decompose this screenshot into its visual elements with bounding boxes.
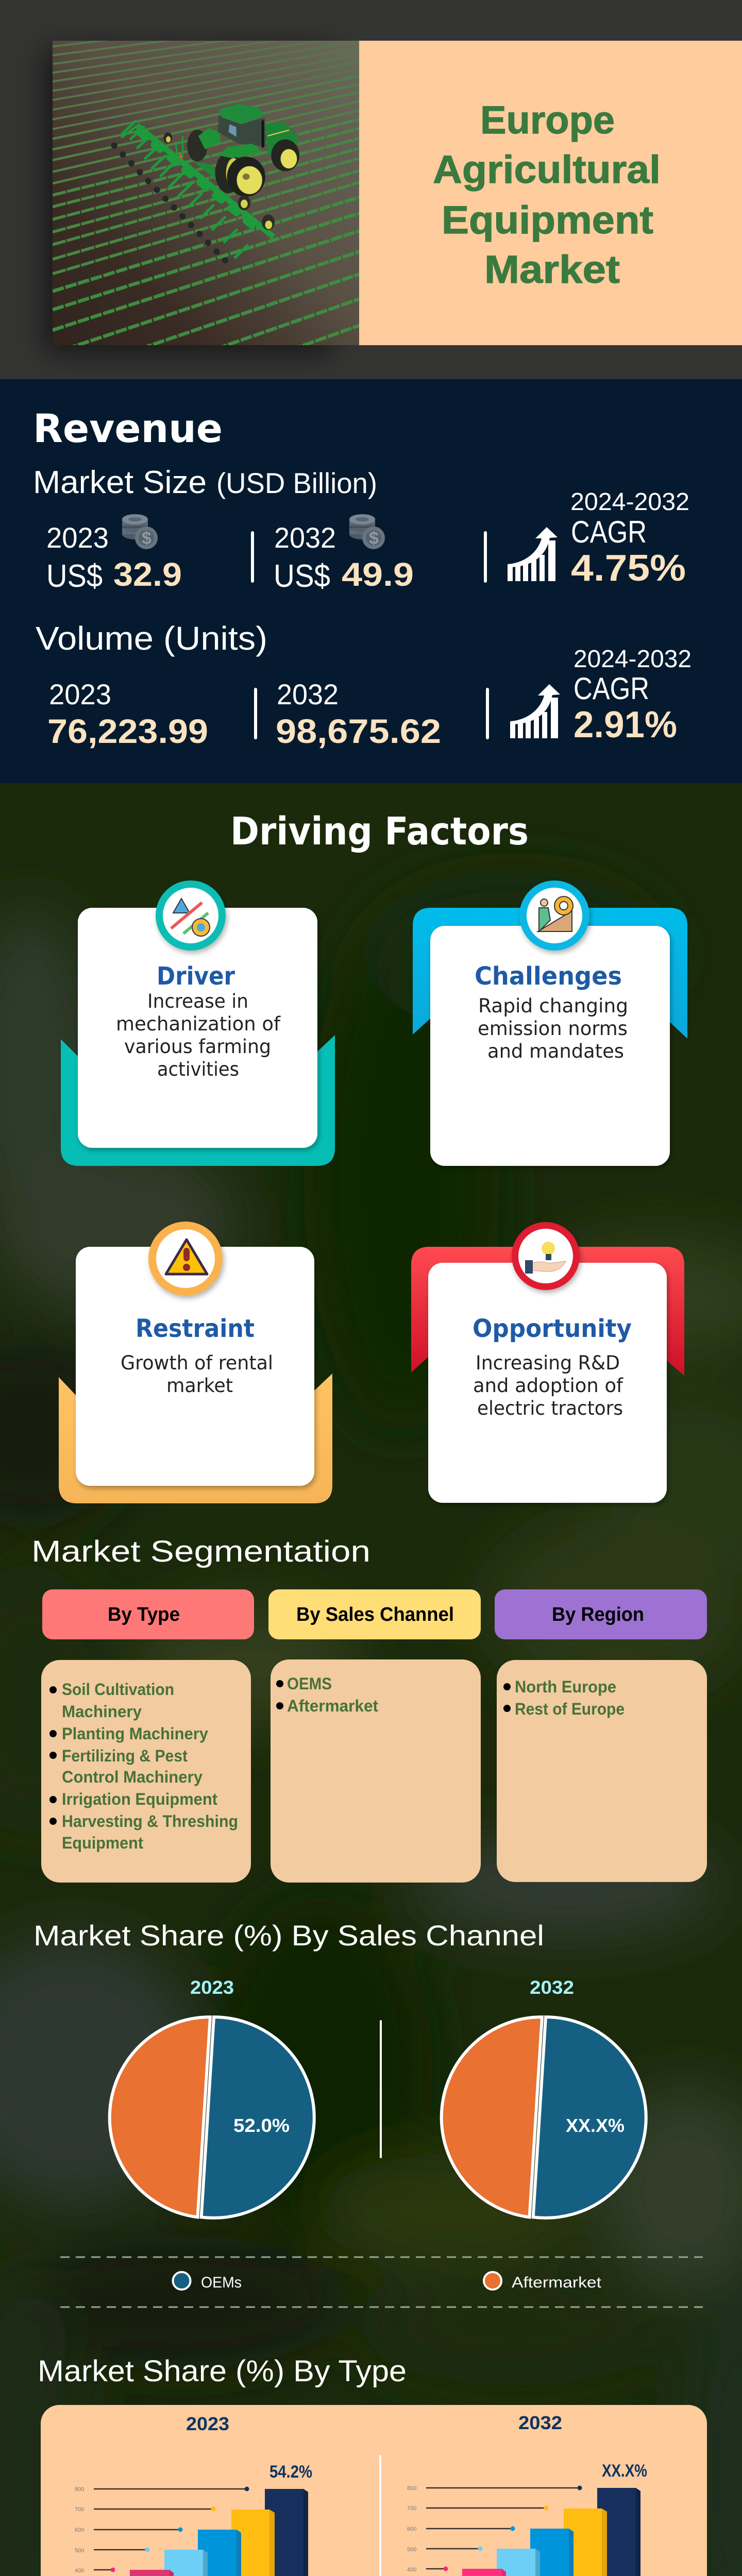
bar chart: 2023: 500 xyxy=(75,2548,84,2554)
pie chart: 2023: 2023 xyxy=(190,1977,234,1998)
stat: 2032 revenue: US$ xyxy=(274,558,330,594)
body text xyxy=(116,990,281,1080)
card: Challenges xyxy=(413,880,687,1166)
stat: revenue CAGR: CAGR xyxy=(571,515,647,549)
panel: bar charts xyxy=(41,2405,707,2576)
divider xyxy=(379,2455,381,2576)
stat: 2032 volume: 98,675.62 xyxy=(276,712,441,750)
icon: coins xyxy=(122,514,158,549)
title: Europe xyxy=(480,98,615,142)
stat: volume CAGR xyxy=(574,646,692,745)
bar chart: 2032: 400 xyxy=(407,2567,416,2573)
stat: 2023 revenue: 32.9 xyxy=(113,556,182,593)
segment list: By Type: Irrigation Equipment xyxy=(62,1790,217,1808)
body text: Increase in xyxy=(147,990,248,1012)
segment list: By Type: Soil Cultivation xyxy=(62,1680,174,1699)
legend: sales channel: OEMs xyxy=(201,2274,242,2291)
stat: 2032 volume xyxy=(276,678,441,750)
subheading: market size: (USD Billion) xyxy=(216,467,377,499)
segment header: By Region: By Region xyxy=(552,1604,644,1625)
stat: 2032 revenue: 49.9 xyxy=(342,556,414,593)
bar chart: 2023 xyxy=(75,2413,312,2576)
body text: various farming xyxy=(124,1036,271,1058)
tractor xyxy=(187,104,299,230)
segment list: By Type: Equipment xyxy=(62,1834,143,1852)
body text: Growth of rental xyxy=(121,1352,273,1374)
divider xyxy=(380,2020,382,2158)
body text: Increasing R&D xyxy=(476,1352,620,1374)
bar chart: 2023: 2023 xyxy=(186,2413,229,2434)
segment list: By Region: Rest of Europe xyxy=(515,1700,625,1718)
revenue panel xyxy=(0,379,742,783)
stat: 2023 revenue: 2023 xyxy=(46,521,109,554)
icon: growth chart xyxy=(510,684,560,738)
stat: revenue CAGR xyxy=(570,488,689,589)
icon: warning badge xyxy=(148,1222,223,1296)
segment list: By Type: Machinery xyxy=(62,1702,142,1721)
body text: market xyxy=(166,1375,233,1397)
body text: activities xyxy=(157,1058,239,1080)
divider xyxy=(251,531,254,583)
legend: sales channel xyxy=(173,2272,602,2291)
bar chart: 2023: 700 xyxy=(75,2506,84,2513)
pie chart: 2032: XX.X% xyxy=(566,2115,625,2136)
subheading: market size xyxy=(33,465,377,500)
cultivator toolbar xyxy=(114,121,274,266)
bar chart: 2032: 700 xyxy=(407,2505,416,2512)
body text: mechanization of xyxy=(116,1013,281,1035)
icon: opportunity badge xyxy=(512,1222,580,1290)
segment header: By Sales Channel xyxy=(268,1589,481,1639)
heading: Driver xyxy=(157,962,235,991)
bar chart: 2032 xyxy=(407,2412,647,2576)
page background: blurred dark green foliage xyxy=(0,783,742,2576)
segment header: By Type xyxy=(42,1589,254,1639)
heading: Challenges xyxy=(475,962,622,991)
stat: 2023 volume xyxy=(47,678,208,750)
icon: coins: $ xyxy=(142,529,151,548)
icon: growth chart xyxy=(508,527,558,581)
divider xyxy=(254,688,257,739)
pie chart: 2032 xyxy=(442,1977,646,2218)
icon: driver badge xyxy=(156,880,226,951)
bar chart: 2032: 600 xyxy=(407,2526,416,2532)
title xyxy=(433,98,661,292)
segment header: By Sales Channel: By Sales Channel xyxy=(296,1604,454,1625)
bar chart: 2032: 500 xyxy=(407,2547,416,2553)
body text: and mandates xyxy=(487,1040,624,1062)
stat: volume CAGR: 2024-2032 xyxy=(574,646,692,673)
stat: volume CAGR: 2.91% xyxy=(574,704,677,745)
bar chart: 2032: XX.X% xyxy=(602,2461,647,2481)
icon: coins xyxy=(349,514,385,549)
heading: Revenue: Revenue xyxy=(33,405,223,451)
bar chart: 2032: 800 xyxy=(407,2485,416,2492)
lower sections: segmentation, market share, key players, footer xyxy=(31,1535,707,2576)
body text xyxy=(478,995,628,1062)
segment list: By Type: Planting Machinery xyxy=(62,1724,208,1743)
stat: 2032 volume: 2032 xyxy=(277,678,339,710)
segment header: By Region xyxy=(495,1589,707,1639)
divider xyxy=(486,688,489,739)
card: Opportunity xyxy=(411,1222,684,1503)
segment list: By Type: Control Machinery xyxy=(62,1768,203,1786)
stat: 2023 revenue: US$ xyxy=(46,558,103,594)
photo: tractor in field xyxy=(53,41,359,345)
stat: 2023 volume: 76,223.99 xyxy=(47,712,208,750)
segment list: By Type xyxy=(41,1660,251,1883)
card: Restraint xyxy=(59,1222,332,1503)
upper sections: header, revenue, driving factors xyxy=(0,0,742,1505)
heading: Market Segmentation: Market Segmentation xyxy=(31,1535,370,1568)
stat: volume CAGR: CAGR xyxy=(574,671,649,706)
stat: revenue CAGR: 4.75% xyxy=(571,548,686,589)
segment list: By Type: Harvesting & Threshing xyxy=(62,1812,238,1831)
segment list: By Sales Channel: Aftermarket xyxy=(287,1697,378,1715)
body text: and adoption of xyxy=(473,1375,623,1397)
segment list: By Region xyxy=(497,1660,707,1882)
body text: Rapid changing xyxy=(478,995,628,1017)
body text: electric tractors xyxy=(477,1397,623,1419)
card: Driver xyxy=(61,880,335,1166)
subheading: volume: Volume (Units) xyxy=(36,620,267,657)
icon: challenges badge xyxy=(519,880,589,951)
segment list: By Region: North Europe xyxy=(515,1677,616,1696)
segment list: By Type: Fertilizing & Pest xyxy=(62,1747,188,1765)
pie chart: 2023: 52.0% xyxy=(233,2115,290,2136)
pie chart: 2023 xyxy=(110,1977,314,2218)
body text xyxy=(473,1352,623,1419)
heading: Market Share By Type: Market Share (%) By Type xyxy=(38,2354,407,2388)
title panel xyxy=(359,41,742,345)
legend: sales channel: Aftermarket xyxy=(512,2274,602,2291)
stat: 2032 revenue xyxy=(274,521,414,594)
body text: emission norms xyxy=(478,1018,628,1040)
heading: Market Share By Sales Channel: Market Share (%) By Sales Channel xyxy=(33,1919,544,1952)
heading: Restraint xyxy=(136,1314,255,1343)
stat: 2023 revenue xyxy=(46,521,182,594)
bar chart: 2023: 800 xyxy=(75,2486,84,2493)
stat: 2032 revenue: 2032 xyxy=(274,521,336,554)
heading: Driving Factors: Driving Factors xyxy=(230,809,529,854)
bar chart: 2023: 600 xyxy=(75,2527,84,2533)
bar chart: 2023: 54.2% xyxy=(269,2462,312,2482)
divider xyxy=(484,531,487,583)
stat: revenue CAGR: 2024-2032 xyxy=(570,488,689,516)
heading: Opportunity xyxy=(473,1314,632,1343)
title: Market xyxy=(484,248,620,292)
stat: 2023 volume: 2023 xyxy=(49,678,111,710)
body text xyxy=(121,1352,273,1397)
subheading: market size: Market Size xyxy=(33,465,207,500)
segment header: By Type: By Type xyxy=(108,1604,180,1625)
bar chart: 2023: 400 xyxy=(75,2568,84,2574)
icon: coins: $ xyxy=(369,529,379,548)
header band xyxy=(0,0,742,379)
segment list: By Sales Channel: OEMS xyxy=(287,1674,332,1693)
segment list: By Sales Channel xyxy=(271,1659,481,1883)
title: Equipment xyxy=(442,198,653,242)
title: Agricultural xyxy=(433,148,661,192)
pie chart: 2032: 2032 xyxy=(530,1977,574,1998)
bar chart: 2032: 2032 xyxy=(518,2412,562,2433)
